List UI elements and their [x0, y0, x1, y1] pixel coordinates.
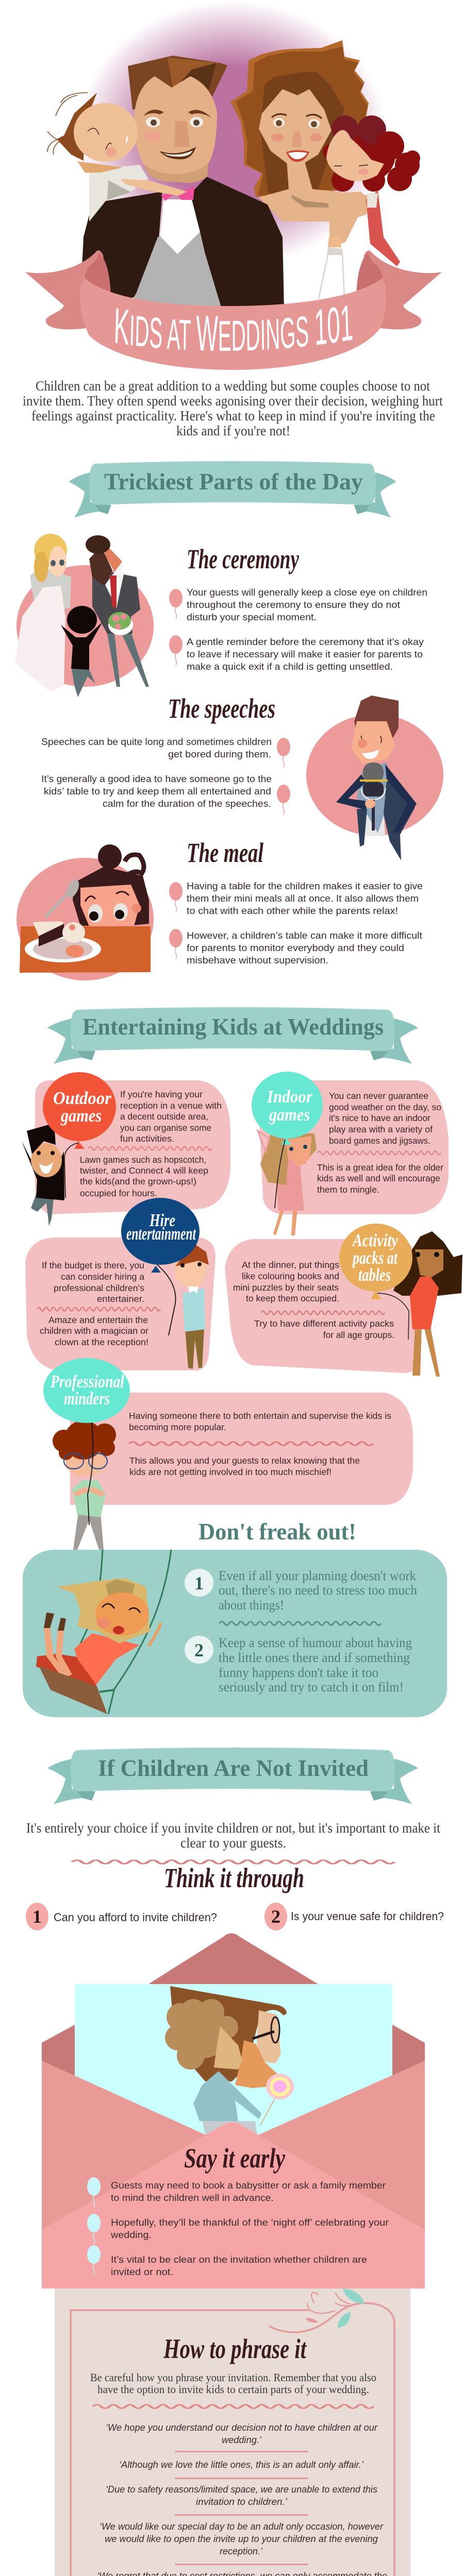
- meal bullet 2: for parents to monitor everybody and they could: [187, 943, 404, 953]
- ribbon right tail: [356, 250, 442, 330]
- say early bullet 1: [87, 2177, 386, 2207]
- activity text: mini puzzles by their seats: [233, 1282, 339, 1293]
- question 2: Is your venue safe for children?: [291, 1910, 444, 1923]
- ceremony bullet 1: Your guests will generally keep a close eye on children: [187, 587, 427, 598]
- indoor text: kids as well and will encourage: [317, 1173, 440, 1183]
- not invited intro: It's entirely your choice if you invite children or not, but it's important to make it: [26, 1820, 440, 1836]
- tip 1: [185, 1568, 417, 1613]
- child running: [61, 606, 103, 697]
- say early bullet 3: invited or not.: [111, 2267, 173, 2277]
- tip 1: 1: [194, 1573, 204, 1594]
- say early bullet 2: Hopefully, they’ll be thankful of the ‘night off’ celebrating your: [111, 2217, 389, 2228]
- indoor girl: [258, 1131, 317, 1235]
- pink bow tie: [161, 187, 194, 201]
- hire text: If the budget is there, you: [42, 1260, 144, 1270]
- purple glow: [31, 0, 433, 268]
- outdoor text: fun activities.: [120, 1133, 174, 1144]
- phrase intro: [90, 2371, 376, 2396]
- tip 2: [185, 1635, 412, 1694]
- hero illustration: family: [31, 0, 433, 309]
- minders text: becoming more popular.: [129, 1422, 226, 1432]
- activity text: At the dinner, put things: [242, 1260, 339, 1270]
- speeches illustration: man with microphone: [306, 696, 443, 860]
- outdoor text: occupied for hours.: [80, 1188, 157, 1198]
- ceremony bullet 2: to leave if necessary will make it easier for parents to: [187, 649, 423, 659]
- ceremony illustration: [15, 534, 154, 697]
- section banner: trickiest parts: Trickiest Parts of the Day: [104, 469, 363, 495]
- activity text: Try to have different activity packs: [254, 1318, 394, 1329]
- section banner: if children are not invited: If Children Are Not Invited: [98, 1755, 369, 1781]
- question 2: 2: [271, 1906, 280, 1927]
- girl child and hand: [323, 115, 420, 266]
- indoor text: [317, 1091, 443, 1195]
- activity text: for all age groups.: [323, 1330, 394, 1340]
- card: professional minders: [43, 1358, 413, 1550]
- heading: think it through: Think it through: [164, 1862, 304, 1893]
- heading: the speeches: The speeches: [168, 693, 275, 724]
- minders text: [129, 1411, 391, 1477]
- card: hire entertainment: [25, 1198, 216, 1370]
- heading: don't freak out: Don't freak out!: [198, 1519, 356, 1545]
- ceremony bullet 2: [169, 635, 424, 672]
- outdoor boy: [22, 1123, 64, 1226]
- heading: how to phrase it: How to phrase it: [163, 2333, 307, 2364]
- meal bullet 1: [169, 881, 423, 916]
- card: activity packs: [225, 1224, 462, 1377]
- heading: say it early: Say it early: [184, 2143, 286, 2174]
- speeches bullet 2: [41, 774, 290, 815]
- sample wording 1: [106, 2422, 378, 2445]
- phrase intro: have the option to invite kids to certain parts of your wedding.: [97, 2383, 369, 2396]
- not invited intro: clear to your guests.: [180, 1835, 286, 1851]
- intro text: kids and if you're not!: [176, 423, 290, 438]
- main title: KIDS AT WEDDINGS 101: [115, 306, 353, 351]
- indoor balloon: Indoor: [267, 1087, 312, 1107]
- groom: [86, 535, 149, 687]
- intro text: invite them. They often spend weeks agonising over their decision, weighing hurt: [23, 393, 443, 409]
- title ribbon: [25, 250, 442, 370]
- meal bullet 2: misbehave without supervision.: [187, 955, 328, 965]
- indoor text: them to mingle.: [317, 1184, 379, 1195]
- meal bullet 1: Having a table for the children makes it easier to give: [187, 881, 423, 891]
- section banner: entertaining kids: [47, 1007, 418, 1064]
- outdoor text: reception in a venue with: [120, 1100, 222, 1111]
- ribbon body: [80, 278, 386, 370]
- say early bullet 2: [87, 2214, 389, 2244]
- outdoor text: the kids(and the grown-ups!): [80, 1176, 196, 1187]
- card: outdoor games: [22, 1072, 230, 1226]
- indoor text: You can never guarantee: [329, 1091, 428, 1101]
- minders text: Having someone there to both entertain and supervise the kids is: [129, 1411, 391, 1421]
- meal bullet 1: them their mini meals all at once. It also allows them: [187, 893, 419, 904]
- hire text: can consider hiring a: [61, 1272, 144, 1282]
- heading: the meal: The meal: [187, 837, 263, 868]
- say early bullet 3: It’s vital to be clear on the invitation whether children are: [111, 2255, 367, 2265]
- indoor text: it's nice to have an indoor: [329, 1113, 430, 1123]
- hire text: Amaze and entertain the: [48, 1315, 148, 1325]
- card: indoor games: [252, 1072, 449, 1235]
- question 1: [26, 1903, 217, 1930]
- activity woman: [393, 1231, 462, 1377]
- tip 1: about things!: [219, 1598, 284, 1613]
- bride: [15, 534, 71, 692]
- outdoor text: [80, 1089, 222, 1198]
- ceremony bullet 1: throughout the ceremony to ensure they do not: [187, 600, 400, 610]
- speeches bullet 1: [41, 737, 290, 768]
- question 2: [264, 1903, 444, 1930]
- outdoor text: Lawn games such as hopscotch,: [80, 1155, 206, 1165]
- meal bullet 1: to chat with each other while the parents relax!: [187, 906, 398, 916]
- minders balloon: minders: [64, 1388, 110, 1409]
- intro text: feelings against practicality. Here's what to keep in mind if you're inviting the: [31, 408, 435, 423]
- outdoor balloon: [43, 1072, 116, 1198]
- intro text: Children can be a great addition to a wedding but some couples choose to not: [36, 378, 430, 394]
- outdoor text: you can organise some: [120, 1123, 211, 1133]
- hire text: children with a magician or: [40, 1326, 148, 1336]
- activity balloon: tables: [358, 1265, 391, 1285]
- intro text: [23, 378, 443, 438]
- activity text: [233, 1260, 394, 1340]
- activity text: to keep them occupied.: [246, 1293, 339, 1303]
- say early bullet 1: Guests may need to book a babysitter or ask a family member: [111, 2180, 386, 2191]
- speeches bullet 2: calm for the duration of the speeches.: [103, 799, 271, 809]
- phrase intro: Be careful how you phrase your invitation. Remember that you also: [90, 2371, 376, 2384]
- envelope front: [42, 2061, 425, 2289]
- speeches bullet 2: kids’ table to try and keep them all entertained and: [44, 786, 271, 796]
- activity balloon: [339, 1224, 412, 1340]
- section banner: trickiest parts: [69, 461, 396, 518]
- hire text: entertainer.: [97, 1294, 144, 1304]
- minder figure: [53, 1420, 116, 1550]
- meal bullet 2: However, a children’s table can make it more difficult: [187, 930, 422, 941]
- tip 2: funny happens don't take it too: [219, 1665, 378, 1680]
- sample wording 1: ‘We hope you understand our decision not to have children at our: [106, 2422, 378, 2433]
- say early bullet 1: to mind the children well in advance.: [111, 2193, 274, 2203]
- not invited intro: [26, 1820, 440, 1851]
- hire balloon: [121, 1198, 200, 1335]
- minders text: This allows you and your guests to relax knowing that the: [129, 1455, 360, 1466]
- question 1: Can you afford to invite children?: [54, 1911, 217, 1924]
- invitation card illustration: [75, 1984, 392, 2139]
- heading: the ceremony: The ceremony: [187, 544, 300, 574]
- minders text: kids are not getting involved in too much mischief!: [129, 1467, 332, 1477]
- frame and flourish bottom left: [71, 2323, 394, 2576]
- tip 1: out, there's no need to stress too much: [219, 1583, 417, 1598]
- sample wording 2: ‘Although we love the little ones, this is an adult only affair.’: [119, 2460, 364, 2470]
- speeches bullet 1: Speeches can be quite long and sometimes children: [41, 737, 272, 747]
- activity text: like colouring books and: [242, 1271, 339, 1281]
- boy child: [47, 93, 187, 222]
- sample wording 1: wedding.’: [222, 2435, 262, 2445]
- minders balloon: Professional: [50, 1371, 124, 1392]
- sample wording 4: reception.’: [220, 2546, 263, 2556]
- outdoor balloon: Outdoor: [53, 1088, 111, 1108]
- hire text: clown at the reception!: [55, 1337, 148, 1347]
- activity balloon: packs at: [352, 1248, 398, 1268]
- man: [80, 56, 284, 309]
- activity balloon: Activity: [352, 1230, 398, 1250]
- say early bullet 2: wedding.: [110, 2230, 152, 2240]
- ceremony bullet 2: make a quick exit if a child is getting unsettled.: [187, 662, 393, 672]
- sample wording 3: invitation to children.’: [196, 2497, 288, 2507]
- hire balloon: Hire: [149, 1210, 175, 1230]
- indoor balloon: [252, 1072, 323, 1208]
- indoor text: This is a great idea for the older: [317, 1162, 443, 1173]
- hire text: professional children's: [54, 1283, 144, 1293]
- tip 2: the little ones there and if something: [219, 1650, 410, 1665]
- sample wording 4: [100, 2521, 384, 2556]
- speeches bullet 1: get bored during them.: [168, 749, 271, 759]
- panel: how to phrase it: [55, 2289, 410, 2576]
- tip 2: Keep a sense of humour about having: [219, 1635, 412, 1650]
- indoor text: board games and jigsaws.: [329, 1136, 430, 1146]
- outdoor text: twister, and Connect 4 will keep: [80, 1165, 208, 1176]
- outdoor text: If you're having your: [120, 1089, 203, 1099]
- hire balloon: entertainment: [126, 1224, 196, 1244]
- hire text: [37, 1260, 160, 1347]
- frame and flourish top right: [71, 2289, 394, 2576]
- ceremony bullet 2: A gentle reminder before the ceremony that it’s okay: [187, 637, 424, 647]
- section banner: if children are not invited: [47, 1748, 418, 1804]
- main title: [115, 306, 353, 351]
- sample wording 3: [106, 2484, 377, 2507]
- white dress details: [319, 237, 344, 299]
- ceremony bullet 1: disturb your special moment.: [187, 612, 317, 622]
- ribbon tails: [25, 250, 111, 330]
- indoor text: play area with a variety of: [329, 1124, 433, 1134]
- tip 1: Even if all your planning doesn't work: [219, 1568, 416, 1583]
- outdoor balloon: games: [60, 1106, 102, 1126]
- section banner: entertaining kids: Entertaining Kids at Weddings: [82, 1014, 384, 1040]
- tip 2: seriously and try to catch it on film!: [219, 1680, 404, 1694]
- sample wording 4: ‘We would like our special day to be an adult only occasion, however: [100, 2521, 384, 2532]
- question 1: 1: [32, 1906, 42, 1927]
- hire boy: [174, 1243, 209, 1369]
- sample wording 4: we would like to open the invite up to your children at the evening: [105, 2534, 378, 2544]
- swing girl: [36, 1550, 171, 1714]
- outdoor text: a decent outside area,: [120, 1111, 208, 1122]
- minders balloon: [43, 1358, 130, 1525]
- meal illustration: girl with cake: [16, 844, 154, 980]
- envelope back: [42, 1933, 425, 2087]
- meal bullet 2: [169, 929, 422, 965]
- panel: don't freak out: [23, 1550, 447, 1717]
- indoor text: good weather on the day, so: [329, 1102, 441, 1112]
- tip 2: 2: [194, 1640, 204, 1660]
- sample wording 3: ‘Due to safety reasons/limited space, we are unable to extend this: [106, 2484, 377, 2495]
- ceremony bullet 1: [169, 587, 427, 622]
- say early bullet 3: [87, 2245, 367, 2277]
- speeches bullet 2: It’s generally a good idea to have someone go to the: [41, 774, 272, 784]
- ribbon folds: [85, 252, 382, 296]
- woman: [230, 40, 375, 222]
- envelope: say it early: [42, 1933, 425, 2289]
- indoor balloon: games: [269, 1105, 310, 1125]
